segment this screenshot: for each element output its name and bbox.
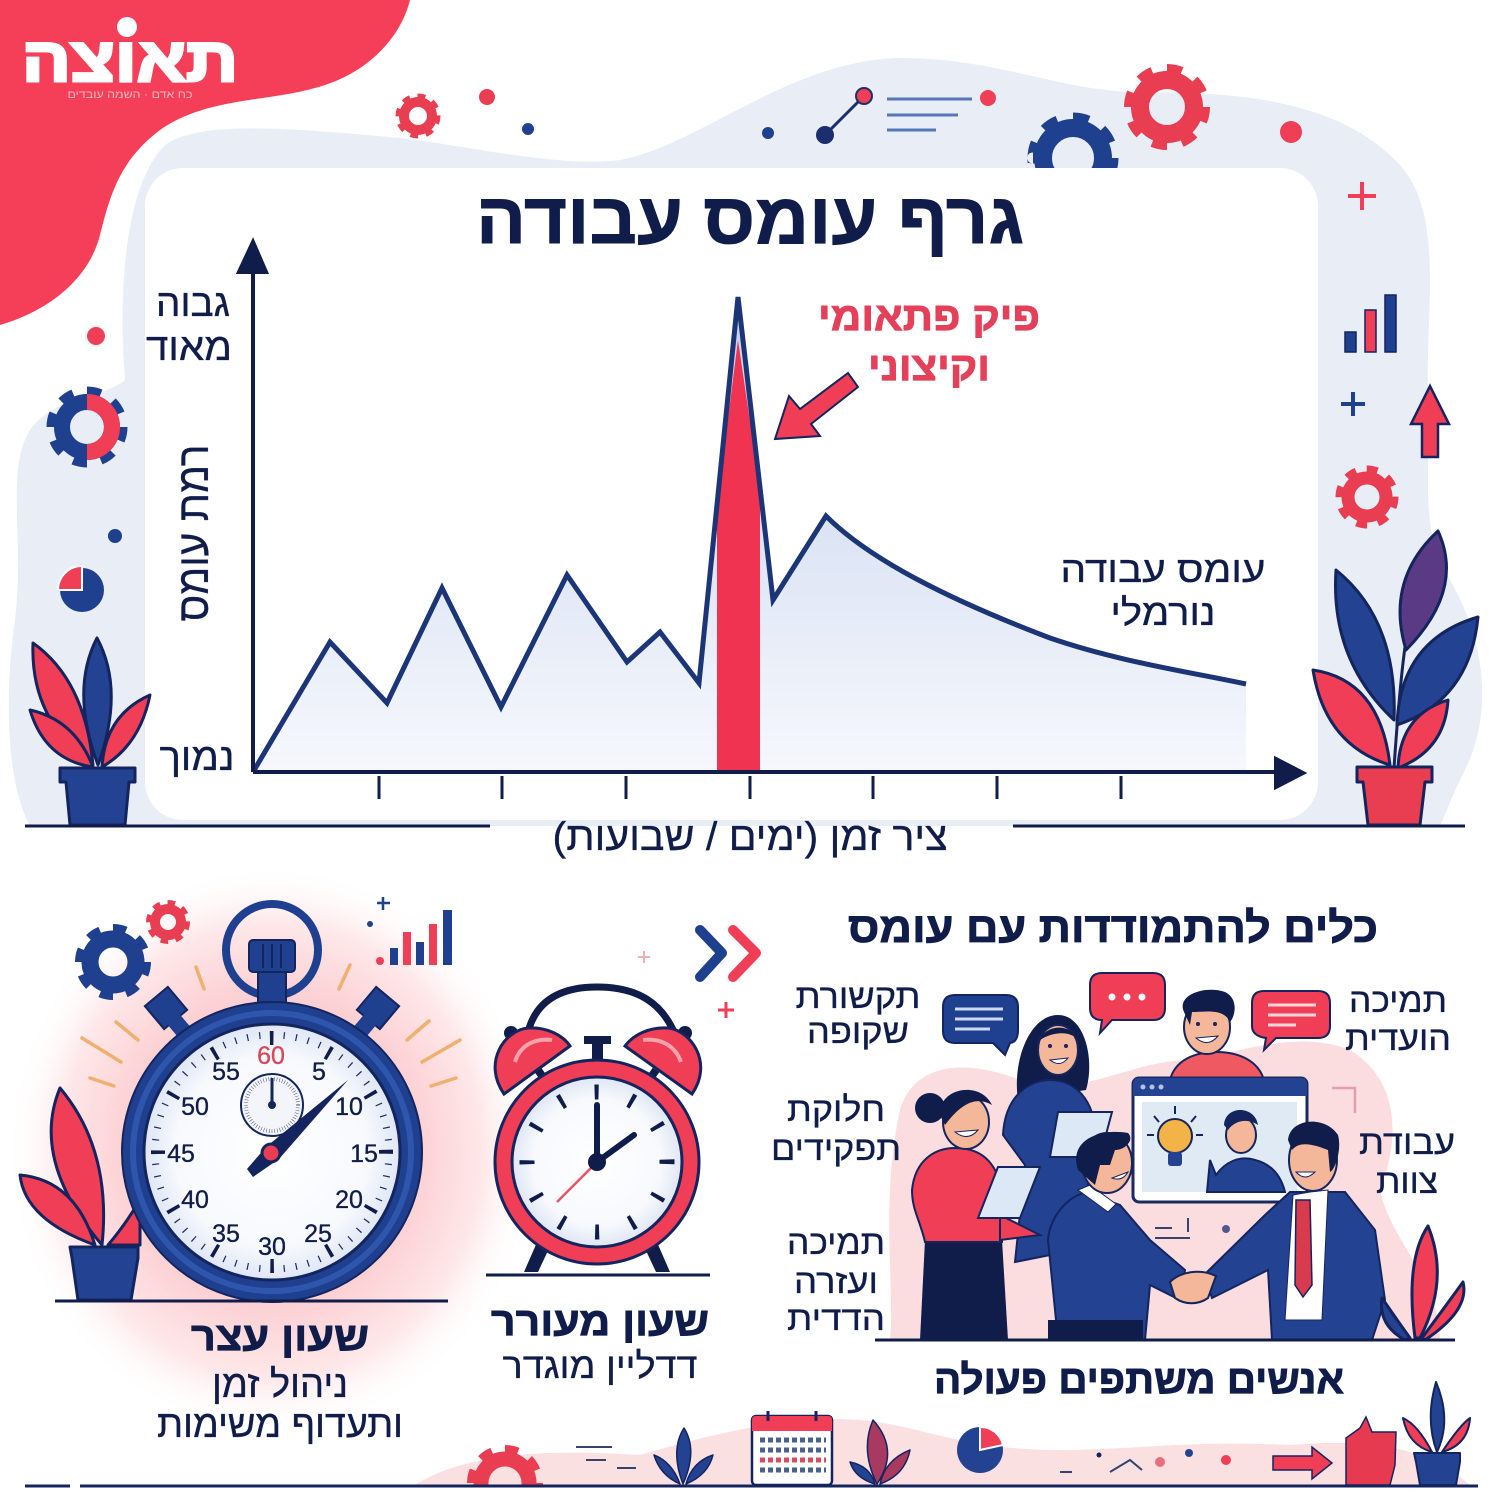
icon: red arrow	[1273, 1447, 1332, 1479]
icon: plant by stopwatch	[20, 1088, 140, 1300]
icon: bar chart	[1345, 295, 1396, 352]
handshake	[1170, 1272, 1216, 1303]
y label low: נמוך	[160, 737, 234, 779]
icon: plus red	[1348, 182, 1376, 210]
normal label	[1060, 549, 1266, 633]
label: mutual support: תמיכה	[787, 1224, 885, 1262]
dial numbers: 15	[350, 1140, 378, 1168]
screen window	[1133, 1078, 1307, 1202]
person: man right	[1204, 1122, 1385, 1340]
icon: red gear	[149, 903, 187, 941]
icon: navy gear behind card	[1028, 112, 1118, 168]
stopwatch description: ותעדוף משימות	[157, 1404, 403, 1446]
y label high: גבוה	[156, 283, 230, 325]
panel: chart card	[145, 168, 1318, 820]
icon: plus and dot	[367, 897, 390, 927]
icon: calendar	[752, 1411, 832, 1485]
tools heading: כלים להתמודדות עם עומס	[848, 904, 1378, 951]
shelf line	[486, 1274, 710, 1276]
icon: small plus marks	[638, 951, 734, 1018]
icon: navy gear	[80, 929, 146, 995]
icon: plant right	[1313, 531, 1478, 825]
label: transparent communication	[796, 978, 920, 1051]
label: mutual support	[787, 1224, 885, 1338]
speech bubble red dots	[1090, 973, 1165, 1033]
person: woman red	[912, 1090, 1040, 1340]
speech bubble red lines	[1252, 991, 1330, 1050]
alarm heading: שעון מעורר	[491, 1300, 709, 1344]
area under line	[253, 297, 1246, 772]
icon: plant left	[30, 638, 150, 825]
tools section	[771, 904, 1464, 1402]
clock hands	[557, 1105, 634, 1202]
label: information support: הועדית	[1345, 1020, 1451, 1058]
label: transparent communication: שקופה	[807, 1013, 909, 1051]
label: mutual support: ועזרה	[794, 1263, 878, 1301]
icon: potted plant	[1403, 1382, 1470, 1485]
pink wave	[415, 1419, 1470, 1485]
logo: תאוצה	[22, 26, 238, 95]
peak callout: וקיצוני	[868, 345, 990, 389]
icon: up arrow	[1411, 386, 1449, 457]
label: role division	[771, 1091, 901, 1168]
red spike	[717, 340, 760, 772]
icon: bars	[376, 910, 452, 965]
base line	[25, 1484, 1478, 1488]
person: man top	[1170, 990, 1264, 1080]
icon: network link	[816, 88, 872, 144]
normal label: עומס עבודה	[1060, 549, 1266, 590]
icon: text lines	[887, 99, 972, 130]
pink background blob	[889, 1041, 1440, 1340]
glow	[7, 865, 537, 1435]
normal label: נורמלי	[1110, 592, 1216, 633]
label: teamwork: צוות	[1376, 1163, 1438, 1201]
alarm description: דדליין מוגדר	[502, 1345, 698, 1386]
speech bubble blue	[943, 995, 1018, 1055]
mini marks	[1155, 1218, 1230, 1238]
y label high	[146, 283, 232, 369]
stopwatch	[122, 904, 422, 1302]
icon: red gear top	[399, 97, 437, 135]
icon: chevrons	[700, 930, 756, 977]
label: role division: תפקידים	[771, 1130, 901, 1168]
x axis title: ציר זמן (ימים / שבועות)	[552, 815, 948, 859]
chart	[239, 242, 1303, 799]
rays	[82, 965, 460, 1086]
dot red left	[87, 327, 105, 345]
dial numbers: 50	[181, 1093, 209, 1121]
hand	[247, 1080, 348, 1177]
small marks	[576, 1447, 636, 1468]
dial numbers: 25	[304, 1220, 332, 1248]
arrow to peak	[775, 373, 858, 439]
label: transparent communication: תקשורת	[796, 978, 920, 1016]
stopwatch section	[7, 865, 537, 1446]
stopwatch description: ניהול זמן	[212, 1364, 348, 1406]
ground line	[25, 824, 1465, 828]
peak callout: פיק פתאומי	[818, 295, 1040, 339]
alarm clock	[495, 987, 701, 1272]
icon: purple plant	[850, 1420, 910, 1484]
dial numbers: 5	[312, 1058, 326, 1086]
icon: red gear right	[1340, 470, 1394, 524]
stopwatch heading: שעון עצר	[191, 1315, 369, 1359]
icon: plus navy	[1341, 392, 1365, 416]
background blob	[9, 58, 1482, 826]
dial numbers: 60	[257, 1042, 285, 1070]
icon: pie chart left	[58, 566, 104, 612]
title: גרף עומס עבודה	[476, 179, 1024, 259]
label: information support	[1345, 982, 1451, 1058]
label: teamwork	[1359, 1124, 1455, 1201]
label: mutual support: הדדית	[787, 1300, 885, 1338]
icon: pie	[957, 1427, 1003, 1473]
icon: light bulb	[1147, 1106, 1203, 1166]
dial numbers: 20	[335, 1186, 363, 1214]
person: woman blue	[1003, 1015, 1112, 1262]
mini person	[1207, 1110, 1285, 1192]
stopwatch description	[157, 1364, 403, 1446]
small marks right	[1060, 1449, 1231, 1472]
dial numbers: 40	[181, 1186, 209, 1214]
decorative dots top	[479, 89, 1302, 143]
alarm clock section	[486, 987, 710, 1386]
dial numbers	[167, 1042, 378, 1261]
y label high: מאוד	[146, 327, 232, 369]
x axis	[253, 759, 1303, 787]
shelf line	[55, 1300, 448, 1302]
icon: red shape	[1346, 1417, 1396, 1485]
dial numbers: 10	[335, 1093, 363, 1121]
icon: plant team	[1381, 1226, 1464, 1340]
logo: כח אדם · השמה עובדים	[68, 89, 193, 101]
icon: red gear top right	[1130, 70, 1204, 144]
dial numbers: 35	[212, 1220, 240, 1248]
pink mark	[1332, 1088, 1355, 1113]
sub dial	[241, 1074, 303, 1136]
person: man left	[1048, 1132, 1185, 1340]
peak callout	[818, 295, 1040, 389]
icon: two colour gear left	[52, 392, 122, 462]
dot navy left	[108, 529, 122, 543]
y axis	[239, 242, 266, 772]
label: information support: תמיכה	[1349, 982, 1447, 1020]
ticks	[379, 776, 1121, 799]
icon: blue plant	[654, 1428, 713, 1484]
label: role division: חלוקת	[787, 1091, 885, 1129]
dial numbers: 30	[258, 1233, 286, 1261]
logo corner blob	[0, 0, 410, 325]
workload line	[253, 297, 1246, 772]
label: teamwork: עבודת	[1359, 1124, 1455, 1162]
y axis title: רמת עומס	[169, 444, 218, 622]
caption: collaborating people: אנשים משתפים פעולה	[934, 1358, 1344, 1402]
icon: half gear	[472, 1450, 538, 1500]
dial numbers: 55	[212, 1058, 240, 1086]
dial numbers: 45	[167, 1140, 195, 1168]
speech bubble lines	[955, 1009, 1003, 1029]
bottom decoration strip	[25, 1382, 1478, 1500]
base line	[875, 1338, 1455, 1342]
